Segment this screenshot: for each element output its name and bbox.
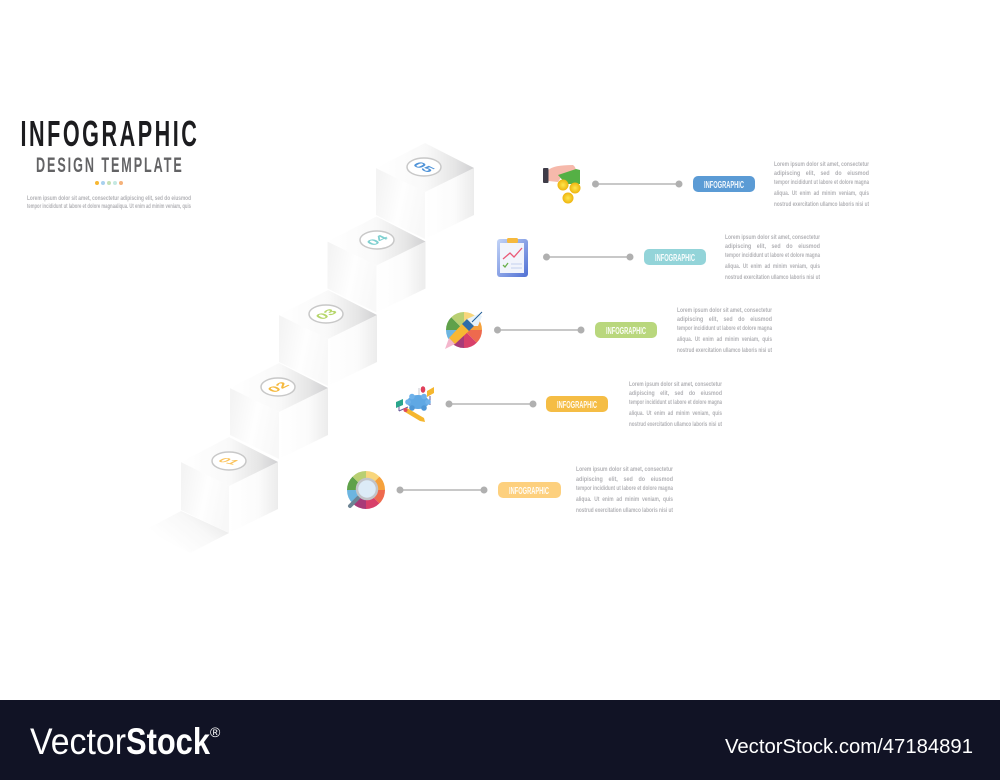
description text: Lorem ipsum dolor sit amet, consectetur [576, 466, 673, 473]
description text [725, 234, 821, 281]
label pill: INFOGRAPHIC [557, 399, 597, 411]
intro text: Lorem ipsum dolor sit amet, consectetur adipiscing elit, sed do eiusmod [27, 195, 191, 202]
subtitle: Design Template: DESIGN TEMPLATE [36, 153, 182, 177]
connector line [494, 326, 584, 334]
connector line [592, 180, 682, 188]
description text: nostrud exercitation ullamco laboris nisi ut [725, 274, 821, 281]
connector line [396, 486, 488, 494]
description text: adipiscing elit, sed do eiusmod [576, 476, 673, 483]
description text: aliqua. Ut enim ad minim veniam, quis [725, 263, 820, 270]
description text: nostrud exercitation ullamco laboris nisi ut [677, 347, 773, 354]
footer bar [0, 700, 1000, 780]
label pill: INFOGRAPHIC [606, 325, 646, 337]
icon: colour wheel with pencil and pen [445, 312, 482, 349]
description text: tempor incididunt ut labore et dolore magna [774, 179, 869, 186]
row 04 [497, 234, 821, 281]
description text: aliqua. Ut enim ad minim veniam, quis [576, 496, 673, 503]
description text: tempor incididunt ut labore et dolore magna [576, 485, 673, 492]
colour dots [95, 181, 123, 185]
label pill [693, 176, 755, 192]
description text [677, 307, 773, 354]
label pill: INFOGRAPHIC [509, 485, 549, 497]
badge 05: 05 [409, 160, 438, 174]
label pill [546, 396, 608, 412]
icon: hand with money and coins [543, 165, 580, 204]
description text: aliqua. Ut enim ad minim veniam, quis [774, 190, 869, 197]
title block [20, 114, 197, 210]
badge 03: 03 [312, 307, 341, 321]
connector line [446, 400, 536, 408]
row 05 [543, 161, 870, 208]
connector line [543, 254, 634, 260]
description text: adipiscing elit, sed do eiusmod [774, 170, 869, 177]
row 01 [350, 466, 674, 514]
badge 01: 01 [214, 456, 244, 466]
description text: tempor incididunt ut labore et dolore magna [725, 252, 820, 259]
label pill: INFOGRAPHIC [655, 252, 695, 264]
description text: tempor incididunt ut labore et dolore magna [629, 399, 722, 406]
step cube 03 [279, 290, 377, 386]
title: Infographic: INFOGRAPHIC [20, 114, 197, 154]
description text [774, 161, 870, 208]
description text: nostrud exercitation ullamco laboris nisi ut [576, 507, 674, 514]
label pill [644, 249, 706, 265]
row 03 [445, 307, 773, 354]
label pill: INFOGRAPHIC [704, 179, 744, 191]
intro text: tempor incididunt ut labore et dolore magnaaliqua. Ut enim ad minim veniam, quis [27, 203, 191, 210]
intro text [27, 195, 191, 210]
description text: aliqua. Ut enim ad minim veniam, quis [677, 336, 772, 343]
description text: adipiscing elit, sed do eiusmod [677, 316, 772, 323]
description text: adipiscing elit, sed do eiusmod [725, 243, 820, 250]
step cube 04 [328, 216, 426, 312]
footer logo: Vector [30, 721, 126, 762]
footer logo: Stock [126, 721, 210, 762]
description text [576, 466, 674, 514]
footer logo [30, 721, 221, 762]
description text: adipiscing elit, sed do eiusmod [629, 390, 722, 397]
step cube 01 [181, 437, 278, 533]
description text: nostrud exercitation ullamco laboris nisi ut [629, 421, 723, 428]
label pill [498, 482, 561, 498]
description text: aliqua. Ut enim ad minim veniam, quis [629, 410, 722, 417]
description text [629, 381, 723, 428]
step cube 02 [230, 363, 328, 459]
description text: Lorem ipsum dolor sit amet, consectetur [774, 161, 869, 168]
footer logo: ® [210, 724, 221, 740]
badge 02: 02 [264, 380, 293, 394]
label pill [595, 322, 657, 338]
badge 04: 04 [363, 233, 392, 247]
step cube 05 [376, 143, 474, 239]
icon: colour wheel with magnifier [350, 479, 377, 506]
stair shadow [145, 511, 229, 553]
description text: nostrud exercitation ullamco laboris nisi ut [774, 201, 870, 208]
description text: tempor incididunt ut labore et dolore magna [677, 325, 772, 332]
row 02 [396, 381, 723, 428]
description text: Lorem ipsum dolor sit amet, consectetur [725, 234, 820, 241]
description text: Lorem ipsum dolor sit amet, consectetur [629, 381, 722, 388]
description text: Lorem ipsum dolor sit amet, consectetur [677, 307, 772, 314]
footer url: VectorStock.com/47184891 [725, 736, 973, 758]
icon: clipboard with chart [497, 238, 528, 277]
icon: gear with pencil and flags [396, 386, 434, 422]
